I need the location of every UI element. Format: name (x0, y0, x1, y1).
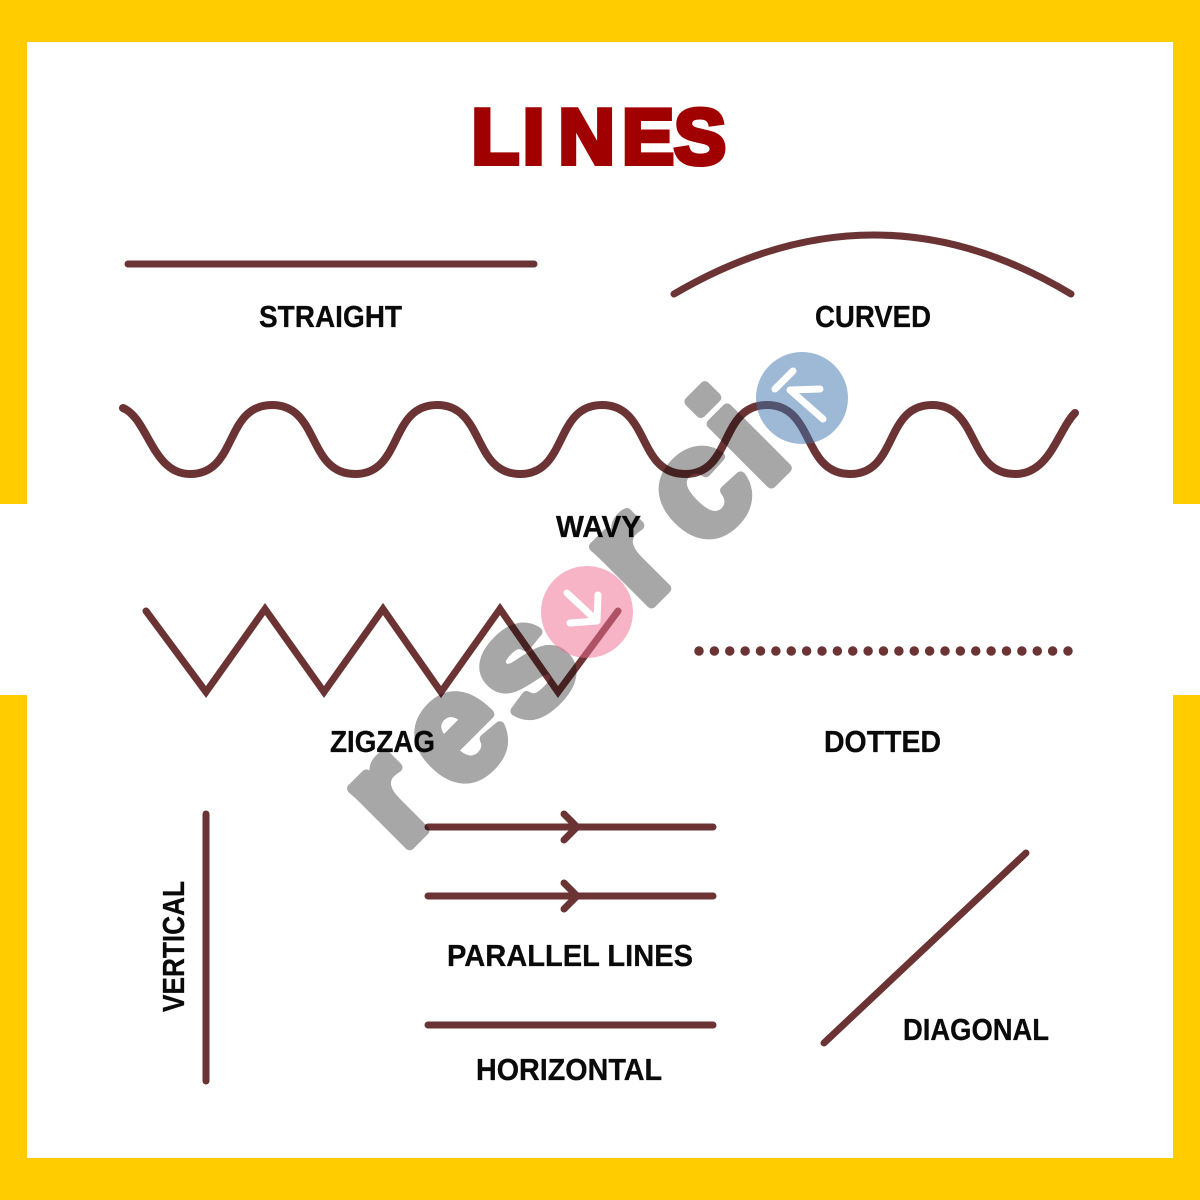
diagonal line: DIAGONAL (903, 1012, 1049, 1047)
watermark text (300, 358, 819, 877)
wavy line (123, 405, 1075, 544)
parallel lines (428, 814, 713, 973)
straight line: STRAIGHT (259, 299, 402, 334)
watermark text: i (661, 358, 819, 516)
diagonal line (824, 853, 1049, 1047)
watermark pink circle (541, 566, 633, 658)
watermark text: e (361, 639, 542, 820)
watermark text: c (605, 395, 786, 576)
watermark text: r (546, 471, 709, 634)
watermark text: r (305, 713, 468, 876)
watermark text: s (428, 571, 609, 752)
curved line (674, 235, 1071, 334)
watermark blue circle (756, 352, 848, 444)
watermark (300, 352, 848, 877)
dotted line: DOTTED (824, 724, 941, 759)
wavy line: WAVY (556, 509, 641, 544)
parallel lines: PARALLEL LINES (447, 938, 693, 973)
zigzag line: ZIGZAG (330, 724, 435, 759)
horizontal line: HORIZONTAL (476, 1052, 662, 1087)
zigzag line (146, 609, 618, 759)
vertical line: VERTICAL (156, 881, 191, 1012)
curved line: CURVED (815, 299, 931, 334)
title: LINES (472, 92, 726, 180)
